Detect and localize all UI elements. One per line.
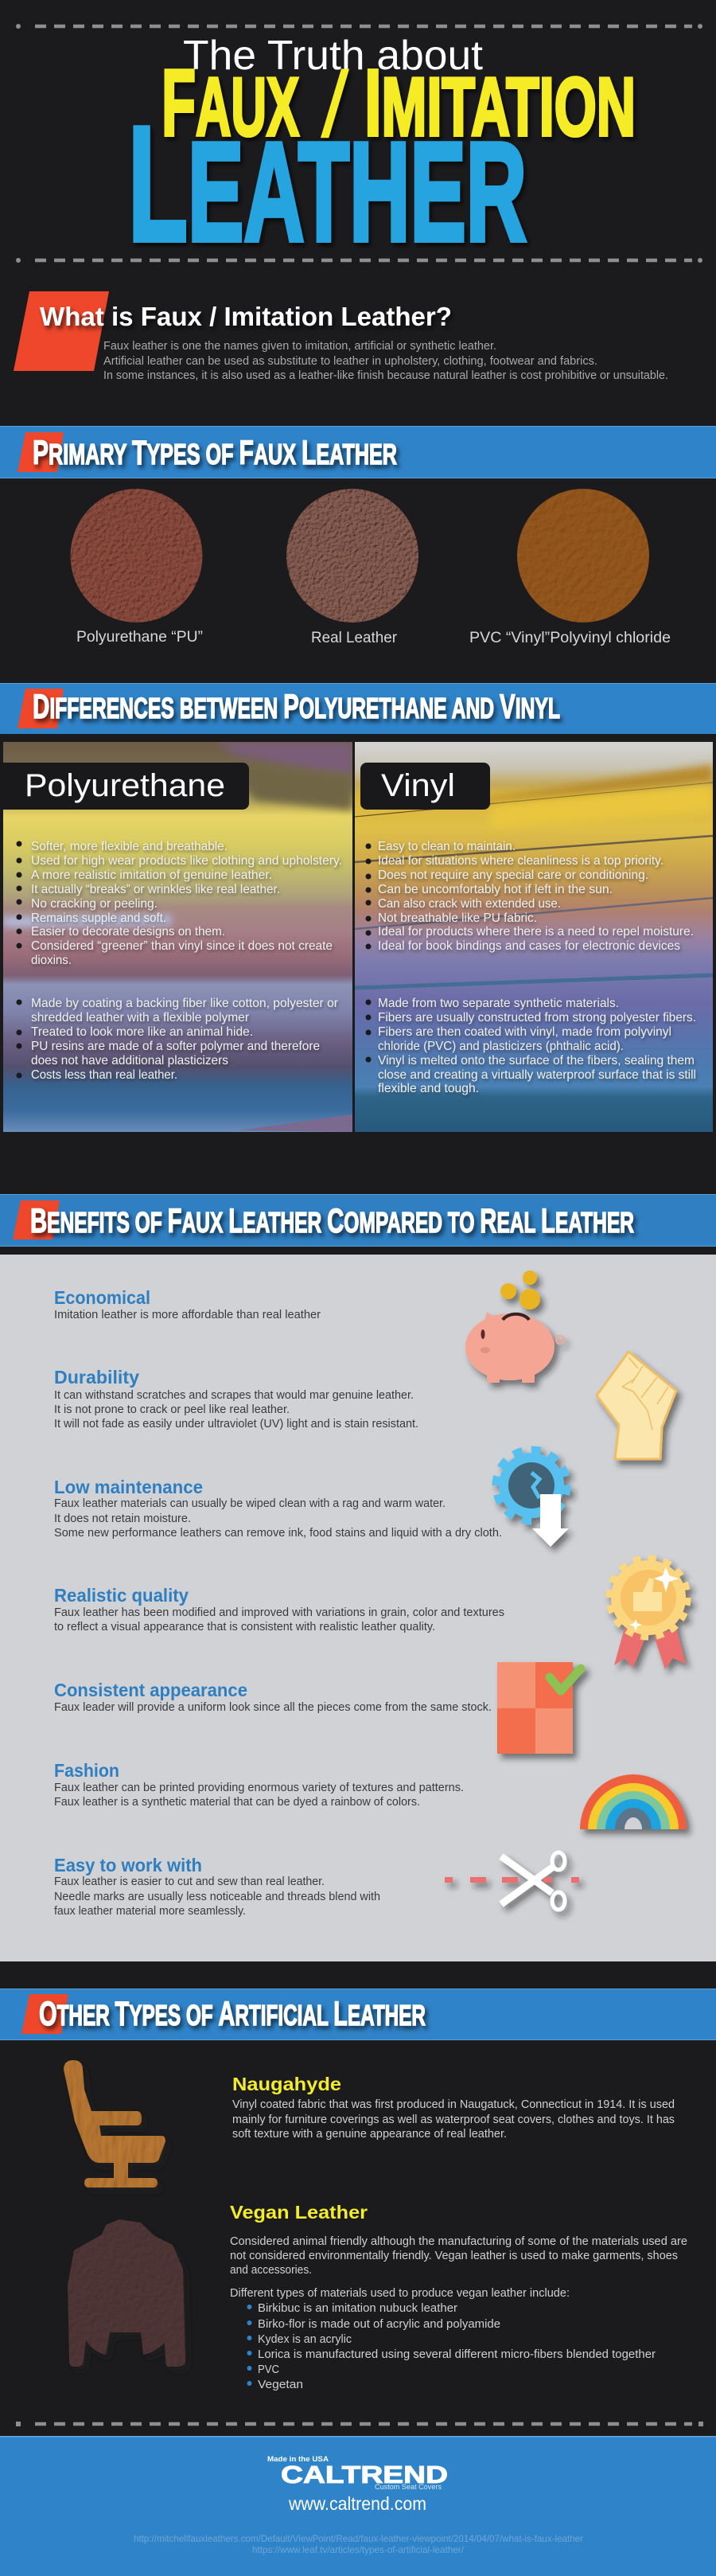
benefit: easy to work with: faux leather material more seamlessly. <box>54 1905 246 1918</box>
sources <box>134 2533 583 2555</box>
benefit: consistent appearance: Consistent appearance <box>54 1680 247 1700</box>
swatch labels: Real Leather <box>311 630 398 646</box>
benefit: realistic quality <box>54 1585 504 1633</box>
sources: http://mitchellfauxleathers.com/Default/ViewPoint/Read/faux-leather-viewpoint/2014/04/07/what-is-faux-leather <box>134 2533 583 2544</box>
benefit: consistent appearance <box>54 1680 492 1714</box>
leather swatches <box>70 489 671 646</box>
bullet list: Lorica is manufactured using several different micro-fibers blended together <box>258 2348 656 2361</box>
swatch: PVC vinyl <box>517 489 649 623</box>
swatch labels: PVC “Vinyl”Polyvinyl chloride <box>469 630 671 646</box>
logo: Caltrend: CALTREND <box>281 2461 448 2488</box>
section band: other types <box>0 1989 716 2040</box>
swatch labels <box>76 629 671 646</box>
benefit: durability: It can withstand scratches and scrapes that would mar genuine leather. <box>54 1389 414 1402</box>
benefit: easy to work with: Faux leather is easier to cut and sew than real leather. <box>54 1875 325 1888</box>
list text: chloride (PVC) and plasticizers (phthalic acid). <box>378 1040 624 1053</box>
benefit: realistic quality: to reflect a visual appearance that is consistent with realistic leather quality. <box>54 1621 435 1633</box>
bullets: properties and construction <box>16 841 22 1078</box>
benefit: low maintenance <box>54 1477 502 1540</box>
name label <box>360 763 490 810</box>
panel: benefits <box>0 1255 716 1961</box>
heading: What is Faux / Imitation Leather? <box>40 302 452 331</box>
benefit: fashion: Faux leather is a synthetic material that can be dyed a rainbow of colors. <box>54 1796 420 1809</box>
list text: Vinyl is melted onto the surface of the fibers, sealing them <box>378 1054 695 1067</box>
benefit: durability: Durability <box>54 1367 139 1388</box>
red tag <box>14 291 109 371</box>
heading: OTHER TYPES OF ARTIFICIAL LEATHER <box>39 1995 426 2033</box>
swatch: real leather <box>286 489 418 623</box>
fabric background <box>3 742 352 1132</box>
heading: BENEFITS OF FAUX LEATHER COMPARED TO REAL LEATHER <box>30 1202 634 1240</box>
benefit: fashion: Faux leather can be printed providing enormous variety of textures and patterns. <box>54 1782 464 1794</box>
benefit: durability: It is not prone to crack or peel like real leather. <box>54 1403 290 1416</box>
list text <box>31 840 342 1082</box>
definition text: Artificial leather can be used as substitute to leather in upholstery, clothing, footwear and fabrics. <box>103 355 597 368</box>
benefit: easy to work with <box>54 1855 380 1918</box>
list text: Made from two separate synthetic materials. <box>378 997 619 1010</box>
list text: Made by coating a backing fiber like cotton, polyester or <box>31 997 339 1010</box>
red tag <box>18 432 64 472</box>
list text: Ideal for book bindings and cases for electronic devices <box>378 939 680 953</box>
panel: what is faux leather <box>14 291 668 382</box>
title line: The Truth about: The Truth about <box>183 33 484 79</box>
block: naugahyde <box>232 2074 675 2141</box>
block: vegan leather: not considered environmentally friendly. Vegan leather is used to make garments, shoes <box>230 2249 678 2262</box>
list text: Not breathable like PU fabric. <box>378 911 537 925</box>
icon: gear with wrench and arrow <box>496 1450 569 1547</box>
block: vegan leather: and accessories. <box>230 2263 312 2277</box>
block: naugahyde: Naugahyde <box>232 2074 341 2094</box>
block: vegan leather <box>230 2202 687 2391</box>
list text: A more realistic imitation of genuine leather. <box>31 868 272 882</box>
bullet list: Kydex is an acrylic <box>258 2332 352 2346</box>
block: vegan leather: Vegan Leather <box>230 2202 368 2223</box>
benefit: economical <box>54 1287 321 1321</box>
red tag <box>18 689 64 728</box>
list text: Easy to clean to maintain. <box>378 840 516 853</box>
benefit: economical: Imitation leather is more affordable than real leather <box>54 1309 321 1321</box>
panel: polyurethane: Polyurethane <box>25 768 225 803</box>
list text <box>378 840 696 1095</box>
section band: benefits <box>0 1194 716 1247</box>
section band: differences <box>0 683 716 734</box>
logo: Caltrend: Made in the USA <box>267 2455 329 2463</box>
icon: leather chair <box>64 2060 165 2188</box>
block: vegan leather: Different types of materials used to produce vegan leather include: <box>230 2286 570 2300</box>
definition text: In some instances, it is also used as a leather-like finish because natural leather is cost prohibitive or unsuitable. <box>103 369 668 382</box>
fabric background <box>355 742 713 1132</box>
benefit: realistic quality: Realistic quality <box>54 1585 189 1606</box>
icon: checked swatch <box>497 1662 581 1754</box>
list text: Ideal for products where there is a need to repel moisture. <box>378 925 694 939</box>
list text: Can be uncomfortably hot if left in the sun. <box>378 883 613 896</box>
list text: PU resins are made of a softer polymer and therefore <box>31 1040 320 1053</box>
panel: vinyl <box>355 742 713 1132</box>
list text: Used for high wear products like clothing and upholstery. <box>31 854 342 868</box>
bullet list: Birko-flor is made out of acrylic and polyamide <box>258 2317 500 2331</box>
benefit: fashion: Fashion <box>54 1760 119 1781</box>
list text: close and creating a virtually waterproof surface that is still <box>378 1068 696 1082</box>
name label <box>0 763 249 810</box>
list text: dioxins. <box>31 954 72 967</box>
block: vegan leather: Considered animal friendly although the manufacturing of some of the materials used are <box>230 2234 687 2248</box>
title line: Faux / Imitation: / <box>321 53 349 158</box>
list text: Fibers are usually constructed from strong polyester fibers. <box>378 1011 696 1025</box>
list text: Costs less than real leather. <box>31 1068 177 1082</box>
icon: medal <box>609 1558 688 1669</box>
block: naugahyde: Vinyl coated fabric that was first produced in Naugatuck, Connecticut in 1914. It is used <box>232 2098 675 2111</box>
section band: primary types <box>0 426 716 478</box>
heading: PRIMARY TYPES OF FAUX LEATHER <box>33 434 397 472</box>
benefit: low maintenance: Some new performance leathers can remove ink, food stains and liquid with a dry cloth. <box>54 1527 502 1540</box>
benefit: fashion <box>54 1760 464 1809</box>
benefit: easy to work with: Easy to work with <box>54 1855 202 1875</box>
website: www.caltrend.com <box>288 2493 426 2514</box>
list text: shredded leather with a flexible polymer <box>31 1011 250 1025</box>
definition text <box>103 340 668 382</box>
benefit: durability <box>54 1367 418 1430</box>
list text: flexible and tough. <box>378 1082 479 1095</box>
list text: Remains supple and soft. <box>31 911 166 925</box>
block: naugahyde: mainly for furniture coverings as well as waterproof seat covers, clothes and toys. It has <box>232 2113 675 2126</box>
swatch labels: Polyurethane “PU” <box>76 629 203 646</box>
list text: Can also crack with extended use. <box>378 897 561 911</box>
benefit: low maintenance: It does not retain moisture. <box>54 1512 191 1525</box>
benefit: consistent appearance: Faux leader will provide a uniform look since all the pieces come from the same stock. <box>54 1701 492 1714</box>
red tag <box>13 1200 60 1239</box>
benefit: economical: Economical <box>54 1287 150 1308</box>
list text: Treated to look more like an animal hide. <box>31 1025 253 1039</box>
heading: DIFFERENCES BETWEEN POLYURETHANE AND VINYL <box>33 688 560 726</box>
icon: fist <box>597 1352 676 1459</box>
list text: Considered “greener” than vinyl since it does not create <box>31 939 333 953</box>
icon: rainbow <box>580 1774 687 1829</box>
list text: No cracking or peeling. <box>31 897 158 911</box>
panel: polyurethane <box>0 742 352 1132</box>
icon: leather jacket <box>68 2219 185 2367</box>
swatch: polyurethane <box>70 489 202 623</box>
bullet list: Birkibuc is an imitation nubuck leather <box>258 2301 457 2315</box>
benefit: easy to work with: Needle marks are usually less noticeable and threads blend with <box>54 1891 380 1903</box>
bullets: properties and construction <box>366 844 371 1062</box>
bullet list: PVC <box>258 2363 279 2376</box>
title line: Faux / Imitation <box>161 50 636 158</box>
logo: Caltrend: Custom Seat Covers <box>375 2483 442 2491</box>
definition text: Faux leather is one the names given to imitation, artificial or synthetic leather. <box>103 340 496 353</box>
sources: https://www.leaf.tv/articles/types-of-artificial-leather/ <box>252 2544 465 2555</box>
list text: It actually “breaks” or wrinkles like real leather. <box>31 883 280 896</box>
list text: Easier to decorate designs on them. <box>31 925 225 939</box>
icon: scissors cutting dashed line <box>445 1852 579 1910</box>
bullet list <box>247 2301 656 2391</box>
benefit: durability: It will not fade as easily under ultraviolet (UV) light and is stain resistant. <box>54 1418 418 1430</box>
panel: vinyl: Vinyl <box>381 768 455 803</box>
title <box>128 33 636 275</box>
footer <box>0 2436 716 2576</box>
title line: Faux / Imitation: FAUX <box>161 50 299 156</box>
block: naugahyde: soft texture with a genuine appearance of real leather. <box>232 2127 507 2141</box>
list text: Softer, more flexible and breathable. <box>31 840 228 853</box>
benefit: realistic quality: Faux leather has been modified and improved with variations in grain, color and textures <box>54 1606 504 1619</box>
list text: does not have additional plasticizers <box>31 1054 228 1067</box>
benefit: low maintenance: Faux leather materials can usually be wiped clean with a rag and warm water. <box>54 1497 446 1510</box>
red tag <box>21 1994 68 2034</box>
list text: Ideal for situations where cleanliness is a top priority. <box>378 854 663 868</box>
list text: Does not require any special care or conditioning. <box>378 868 648 882</box>
icon: piggy bank <box>465 1270 564 1383</box>
benefit: low maintenance: Low maintenance <box>54 1477 203 1497</box>
bullet list: Vegetan <box>258 2378 303 2391</box>
list text: Fibers are then coated with vinyl, made from polyvinyl <box>378 1025 671 1039</box>
logo: Caltrend <box>267 2455 448 2491</box>
